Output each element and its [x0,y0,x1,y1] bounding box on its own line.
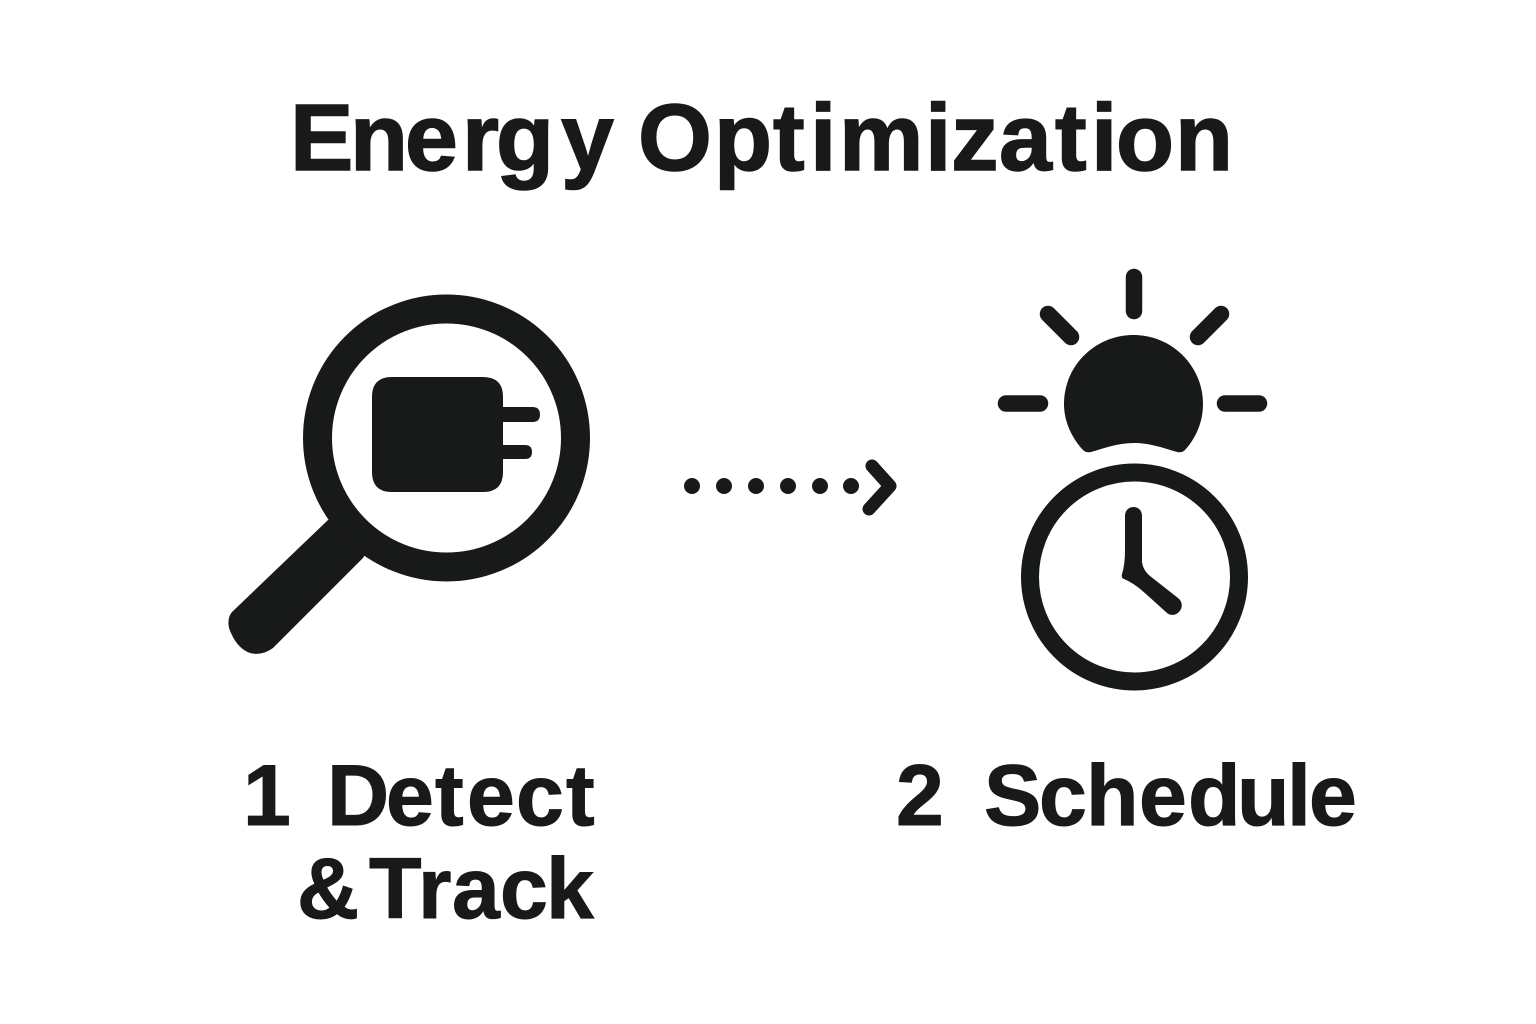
sun rays [1006,277,1259,404]
label: step 2: Schedule [984,748,1357,844]
clock face [1030,472,1239,682]
plug body [372,377,503,492]
arrow: dotted from detect to schedule [684,466,890,509]
magnifier ring [318,309,576,567]
label: step 1: & Track [297,841,594,937]
label: step 1 [243,748,595,937]
plug prongs [500,407,540,459]
label: step 2: 2 [896,748,944,844]
clock hands [1122,507,1182,615]
label: step 1: Detect [327,748,595,844]
label: step 1: 1 [243,748,291,844]
title: Energy Optimization [290,85,1233,191]
sun dome [1064,335,1203,452]
icon: magnifying glass with plug [228,309,575,654]
icon: sun over clock [1006,277,1259,682]
magnifier handle [228,510,375,654]
